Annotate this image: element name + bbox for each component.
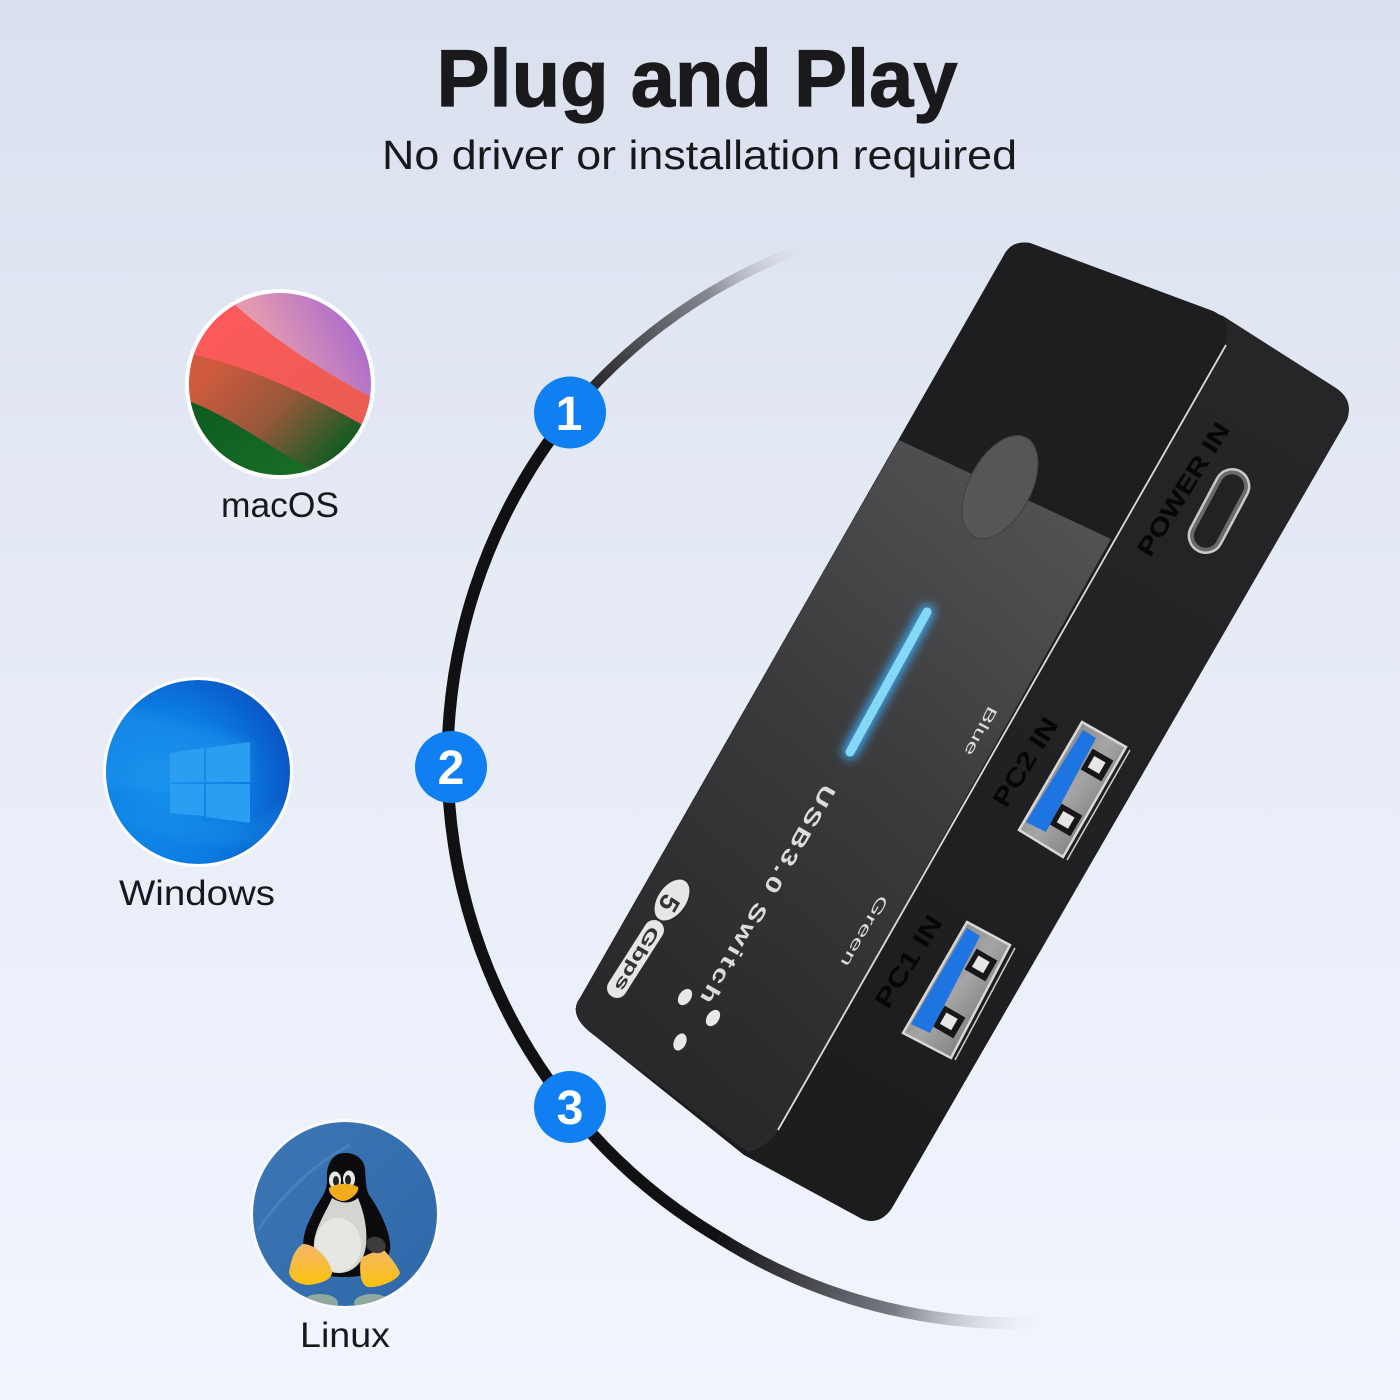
subtitle: No driver or installation required — [382, 132, 1017, 178]
Windows icon — [100, 675, 296, 871]
blue LED bar — [850, 612, 927, 752]
label: POWER IN: POWER IN — [1132, 418, 1236, 561]
number badge 1 — [534, 376, 606, 448]
badge: 5 Gbps: 5 — [652, 889, 686, 917]
badge: 5 Gbps: Gbps — [611, 923, 663, 995]
badge: 5 Gbps — [611, 872, 698, 995]
number badge 1: 1 — [556, 388, 582, 441]
Linux label: Linux — [300, 1316, 391, 1355]
label: Green: Green — [837, 892, 891, 970]
number badge 3 — [534, 1071, 606, 1143]
USB port PC2 — [1019, 722, 1130, 860]
number badge 3: 3 — [557, 1082, 583, 1135]
icon: Tux penguin — [289, 1153, 400, 1287]
switch button — [946, 423, 1054, 551]
lighter front panel — [576, 440, 1111, 1152]
macOS icon — [180, 289, 376, 490]
macOS label: macOS — [221, 486, 339, 525]
label: Blue: Blue — [960, 703, 1000, 759]
connecting arc — [448, 243, 1052, 1323]
device top face — [576, 242, 1227, 1152]
USB switch device — [576, 242, 1349, 1221]
device body side face — [576, 242, 1349, 1221]
title: Plug and Play — [436, 34, 958, 124]
USB port PC1 — [903, 922, 1015, 1060]
number badge 2: 2 — [438, 742, 464, 795]
label: PC1 IN: PC1 IN — [869, 910, 948, 1013]
icon: Windows logo panes — [170, 742, 250, 823]
label: USB3.0 Switch: USB3.0 Switch — [694, 780, 840, 1010]
Windows label: Windows — [119, 874, 275, 913]
number badge 2 — [415, 731, 487, 803]
Linux icon — [250, 1119, 440, 1312]
label: PC2 IN: PC2 IN — [987, 713, 1064, 812]
three indicator dots — [671, 986, 723, 1053]
USB-C port — [1183, 463, 1255, 559]
